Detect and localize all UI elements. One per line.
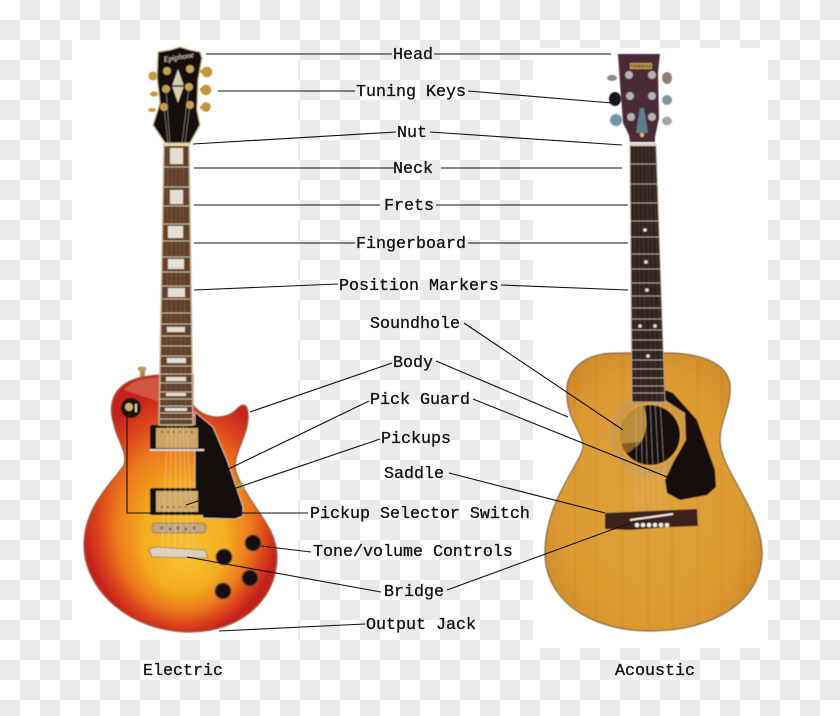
tune-o-matic bridge bbox=[149, 547, 208, 558]
electric pick guard bbox=[195, 412, 243, 519]
acoustic guitar bbox=[545, 54, 762, 640]
callout: Body bbox=[250, 354, 568, 417]
acoustic head bbox=[607, 54, 672, 142]
callout: Soundhole bbox=[370, 315, 623, 430]
callout: Head: Head bbox=[393, 46, 433, 65]
headstock logo: Epiphone bbox=[162, 50, 195, 64]
callout: Tuning Keys: Tuning Keys bbox=[356, 83, 466, 102]
wood grain bbox=[696, 421, 699, 496]
callout: Soundhole: Soundhole bbox=[370, 315, 460, 334]
acoustic tuning keys bbox=[607, 72, 672, 126]
callout: Nut bbox=[193, 124, 622, 145]
bridge pickup bbox=[150, 488, 204, 515]
panel: electric guitar photo background bbox=[72, 40, 298, 640]
tuner posts bbox=[624, 70, 656, 122]
callout: Body: Body bbox=[393, 354, 433, 373]
yamaha badge bbox=[630, 63, 652, 69]
callout: Tone/volume Controls: Tone/volume Controls bbox=[313, 543, 513, 562]
bridge pins bbox=[635, 523, 669, 527]
callout: Pickup Selector Switch: Pickup Selector Switch bbox=[310, 505, 530, 524]
strap button bbox=[138, 366, 146, 380]
panel: acoustic guitar photo background bbox=[533, 48, 768, 648]
callout: Position Markers bbox=[194, 277, 628, 296]
caption: Electric: Electric bbox=[143, 662, 223, 681]
neck pickup bbox=[150, 425, 204, 451]
acoustic head: YAMAHA bbox=[630, 64, 652, 70]
right tuning keys bbox=[200, 67, 212, 112]
headstock diamond inlay bbox=[172, 69, 184, 103]
acoustic strings bbox=[636, 400, 667, 520]
acoustic neck and fingerboard bbox=[630, 143, 665, 402]
callout: Bridge: Bridge bbox=[384, 583, 444, 602]
acoustic position dots bbox=[638, 228, 657, 358]
electric body bbox=[84, 375, 277, 632]
callout: Pickup Selector Switch bbox=[127, 412, 530, 524]
acoustic saddle bbox=[630, 513, 673, 521]
callout: Position Markers: Position Markers bbox=[339, 277, 499, 296]
callout: Pickups bbox=[186, 430, 451, 505]
callout: Saddle bbox=[384, 465, 605, 513]
position marker inlays bbox=[165, 148, 187, 411]
electric neck and fingerboard bbox=[159, 143, 193, 425]
callout: Fingerboard: Fingerboard bbox=[356, 235, 466, 254]
acoustic bridge bbox=[605, 509, 698, 530]
electric head bbox=[148, 47, 212, 143]
callout: Pickups: Pickups bbox=[381, 430, 451, 449]
strings over body bbox=[162, 420, 194, 550]
rosette rings bbox=[609, 394, 691, 476]
callout: Neck: Neck bbox=[393, 160, 433, 179]
callout: Pick Guard bbox=[214, 391, 687, 485]
left tuning keys bbox=[148, 72, 158, 112]
callout: Pick Guard: Pick Guard bbox=[370, 391, 470, 410]
tuner posts bbox=[160, 65, 194, 111]
callout: Tuning Keys bbox=[218, 83, 612, 103]
callout: Saddle: Saddle bbox=[384, 465, 444, 484]
soundhole bbox=[618, 400, 680, 465]
callout: Frets: Frets bbox=[384, 197, 434, 216]
caption: Acoustic: Acoustic bbox=[615, 662, 695, 681]
acoustic nut bbox=[630, 143, 656, 146]
callout: Bridge bbox=[187, 523, 630, 602]
horn highlight bbox=[124, 377, 160, 402]
truss rod cover bbox=[636, 108, 648, 133]
callout: Nut: Nut bbox=[397, 124, 427, 143]
electric nut bbox=[164, 143, 189, 146]
control knobs bbox=[215, 535, 261, 599]
acoustic body bbox=[545, 353, 762, 631]
selector switch bbox=[121, 398, 141, 418]
stop tailpiece bbox=[152, 523, 206, 533]
electric guitar bbox=[84, 47, 277, 632]
output jack plate bbox=[235, 482, 245, 492]
callout: Output Jack bbox=[219, 616, 476, 635]
acoustic pick guard bbox=[665, 390, 716, 500]
callout: Output Jack: Output Jack bbox=[366, 616, 476, 635]
